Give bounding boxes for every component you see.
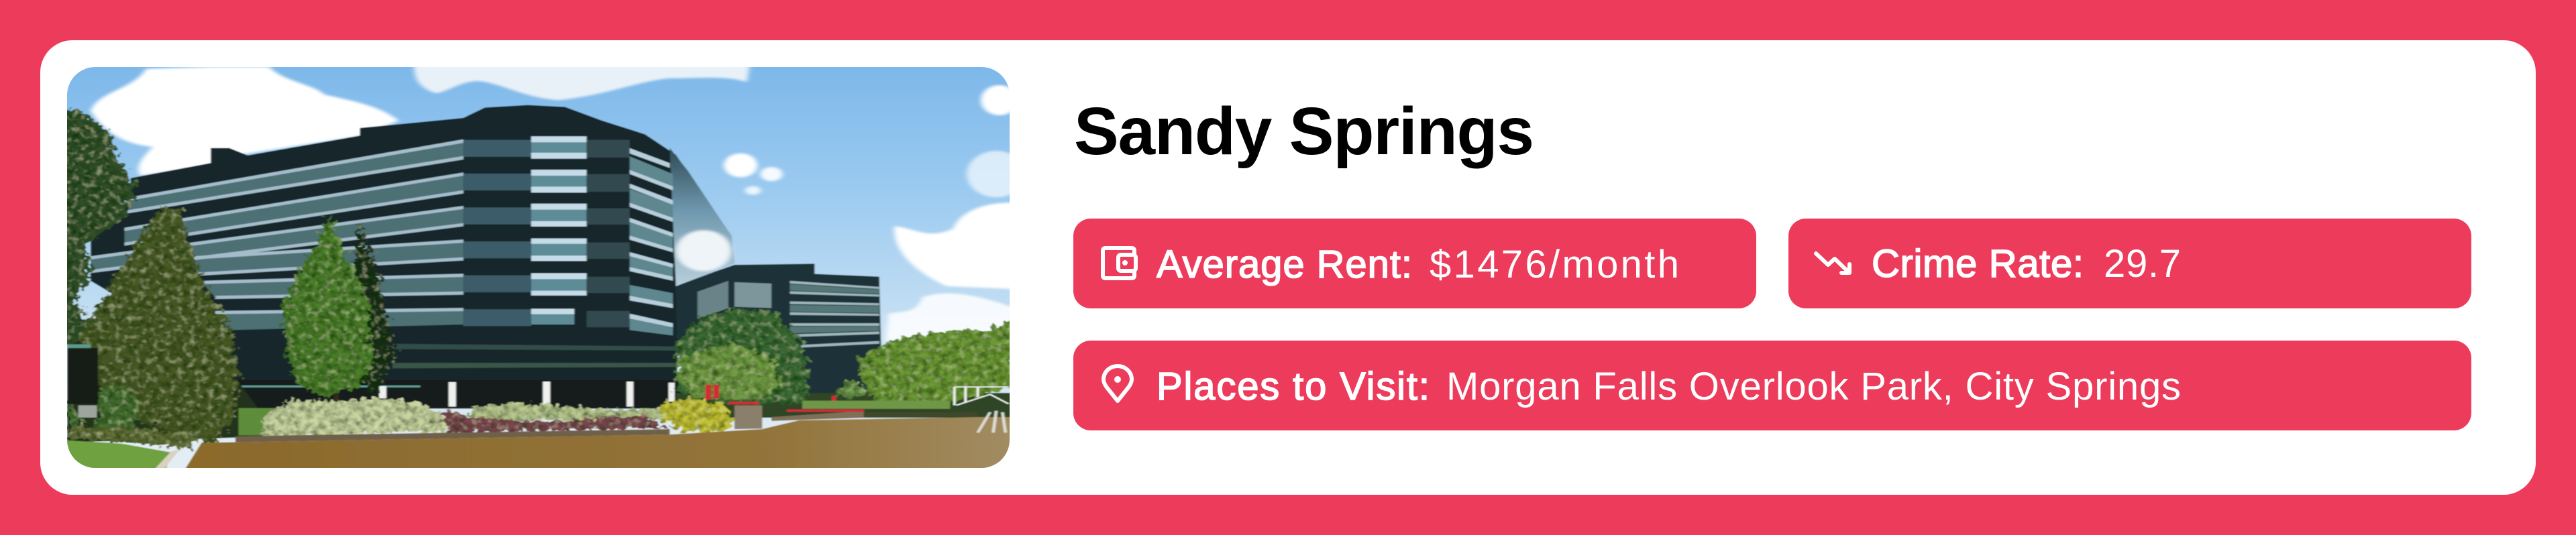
dark planting behind left trees bbox=[67, 314, 263, 442]
distant lawn bbox=[802, 401, 950, 409]
icon: wallet bbox=[1103, 248, 1136, 278]
left shrubs bbox=[67, 386, 137, 428]
value: rent: $1476/month bbox=[1430, 243, 1679, 286]
pond water bbox=[183, 417, 1015, 473]
far right willows bbox=[858, 319, 1015, 406]
foreground lawn bbox=[54, 440, 172, 473]
right tree group bbox=[676, 308, 808, 406]
ground floor bbox=[232, 380, 688, 408]
back building bbox=[676, 263, 882, 394]
wing window bands bbox=[91, 141, 464, 330]
footbridge bbox=[955, 387, 1009, 406]
pill: average rent bbox=[1073, 219, 1756, 308]
label: places to visit: Places to Visit: bbox=[1157, 365, 1430, 408]
pill: crime rate bbox=[1788, 219, 2471, 308]
icon: trending down bbox=[1816, 253, 1849, 273]
value: places: Morgan Falls Overlook Park, City Springs bbox=[1446, 365, 2181, 408]
centre tree bbox=[282, 213, 374, 398]
photo: office building by a pond bbox=[54, 64, 1027, 473]
patio and red umbrellas bbox=[706, 385, 864, 412]
icon: map pin bbox=[1104, 366, 1132, 401]
clouds bbox=[91, 64, 1026, 341]
label: crime rate: Crime Rate: bbox=[1872, 242, 2084, 286]
label: average rent: Average Rent: bbox=[1157, 243, 1412, 286]
dark tree, left edge bbox=[54, 107, 137, 349]
value: crime rate: 29.7 bbox=[2104, 242, 2181, 286]
dark band behind right trees bbox=[676, 393, 1015, 418]
lawn patch bbox=[239, 408, 276, 435]
small right tree bbox=[836, 377, 867, 400]
title: Sandy Springs bbox=[1074, 94, 1534, 169]
lower dark floors bbox=[382, 335, 678, 377]
gazebo bbox=[67, 345, 98, 418]
curved glass side bbox=[669, 148, 735, 286]
wing light stripes bbox=[91, 139, 464, 314]
dark conifer behind centre tree bbox=[343, 222, 396, 396]
trees bbox=[54, 107, 1015, 445]
pill: places to visit bbox=[1073, 341, 2471, 430]
fountain bbox=[978, 411, 1006, 432]
columns bbox=[379, 381, 688, 407]
tall tree, left bbox=[78, 207, 239, 445]
flower beds bbox=[67, 397, 737, 449]
stone wall bbox=[235, 429, 669, 442]
main building bbox=[91, 105, 735, 408]
tower window rows bbox=[464, 140, 531, 326]
centre tree trunk bbox=[333, 393, 339, 402]
sky bbox=[54, 64, 1027, 469]
